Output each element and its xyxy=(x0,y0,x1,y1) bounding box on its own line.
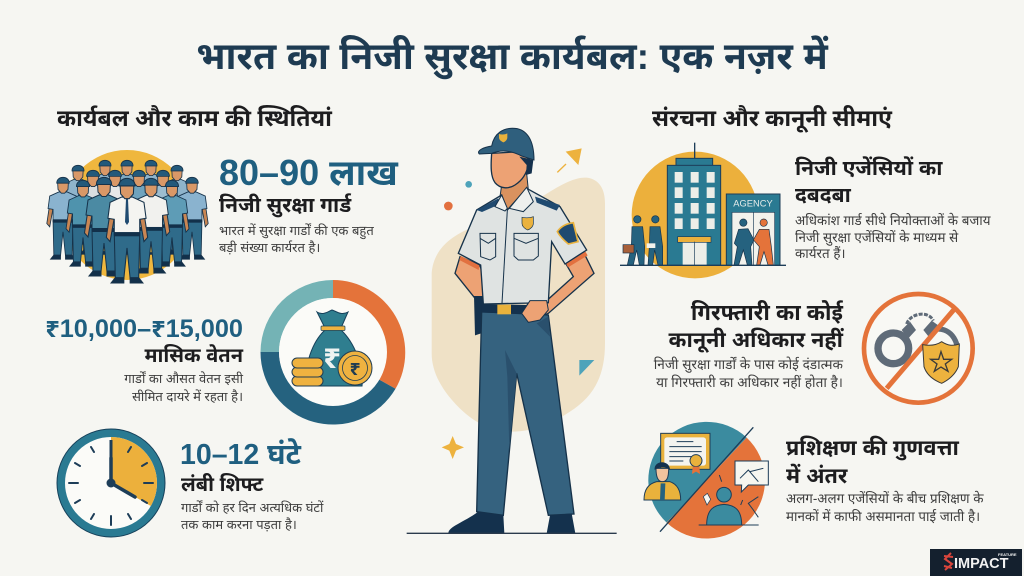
icon: agency buildings xyxy=(620,143,786,278)
cap badge xyxy=(499,133,507,142)
icon: banned handcuffs and badge xyxy=(863,293,974,404)
description line 2: बड़ी संख्या कार्यरत है। xyxy=(219,240,320,255)
logo: Impact Feature: FEATURE xyxy=(998,552,1017,557)
ground line xyxy=(407,531,617,535)
epaulettes and collar xyxy=(477,187,560,303)
title: भारत का निजी सुरक्षा कार्यबल: एक नज़र में xyxy=(196,35,829,79)
shirt xyxy=(458,188,587,304)
icon: split circle of training xyxy=(644,422,768,539)
trousers xyxy=(477,312,574,515)
icon: donut with money bag: ₹ xyxy=(323,340,341,375)
description line 2: मानकों में काफी असमानता पाई जाती है। xyxy=(786,509,980,524)
heading: structure and legal limits: संरचना और कानूनी सीमाएं xyxy=(652,105,893,133)
panel: long shifts xyxy=(57,429,324,537)
sleeve bands xyxy=(459,252,588,270)
description: निजी सुरक्षा गार्डों के पास कोई दंडात्मक xyxy=(654,355,844,374)
icon: donut with money bag xyxy=(260,280,405,425)
description line 2: निजी सुरक्षा एजेंसियों के माध्यम से xyxy=(795,230,959,246)
trouser shading xyxy=(505,317,550,450)
sign: AGENCY: AGENCY xyxy=(733,198,773,208)
heading line 2: कानूनी अधिकार नहीं xyxy=(669,327,845,354)
neck xyxy=(500,173,528,212)
panel: guard count xyxy=(47,150,399,283)
description: भारत में सुरक्षा गार्डों की एक बहुत xyxy=(219,223,374,240)
description line 3: कार्यरत हैं। xyxy=(795,246,846,261)
head xyxy=(491,152,530,188)
belt buckle xyxy=(497,305,511,314)
description line 2: सीमित दायरे में रहता है। xyxy=(132,389,243,404)
stat: hours: 10–12 घंटे xyxy=(180,437,302,471)
shoulder patch xyxy=(557,223,578,244)
label: long shift: लंबी शिफ्ट xyxy=(181,472,265,496)
shoes xyxy=(448,512,575,533)
decorative shapes xyxy=(442,148,594,459)
description: गार्डों को हर दिन अत्यधिक घंटों xyxy=(181,500,324,515)
illustration: security guard xyxy=(407,128,617,533)
heading line 1: निजी एजेंसियों का xyxy=(795,156,943,180)
icon: group of guards xyxy=(47,150,208,283)
icon: donut with money bag: ₹ xyxy=(350,359,360,380)
heading line 1: गिरफ्तारी का कोई xyxy=(691,300,844,325)
heading line 1: प्रशिक्षण की गुणवत्ता xyxy=(786,435,959,461)
heading: workforce and working conditions: कार्यबल और काम की स्थितियां xyxy=(57,105,333,131)
shirt badge xyxy=(522,217,533,230)
logo: Impact Feature xyxy=(930,549,1022,576)
label: monthly salary: मासिक वेतन xyxy=(144,343,244,367)
description line 2: तक काम करना पड़ता है। xyxy=(181,517,297,532)
label: private security guards: निजी सुरक्षा गार्ड xyxy=(219,193,352,218)
panel: no legal arrest powers xyxy=(654,293,974,404)
logo: Impact Feature: IMPACT xyxy=(954,556,1009,572)
beige blob xyxy=(432,178,605,432)
cap xyxy=(479,128,534,160)
description: अधिकांश गार्ड सीधे नियोक्ताओं के बजाय xyxy=(795,213,991,228)
holster xyxy=(474,296,483,335)
heading line 2: में अंतर xyxy=(786,463,848,488)
belt xyxy=(482,304,528,314)
pockets xyxy=(480,233,538,260)
panel: dominance of private agencies xyxy=(620,143,991,278)
icon: clock xyxy=(57,429,165,537)
description: अलग-अलग एजेंसियों के बीच प्रशिक्षण के xyxy=(786,491,984,506)
description line 2: या गिरफ्तारी का अधिकार नहीं होता है। xyxy=(656,374,843,390)
hair xyxy=(519,157,533,175)
hand xyxy=(522,301,548,322)
stat: salary range: ₹10,000–₹15,000 xyxy=(45,315,243,343)
panel: monthly salary xyxy=(45,280,405,425)
arms xyxy=(455,252,594,322)
heading line 2: दबदबा xyxy=(795,184,852,207)
panel: training quality gap xyxy=(644,422,984,539)
stat: 80-90 lakh: 80–90 लाख xyxy=(219,152,399,193)
description: गार्डों का औसत वेतन इसी xyxy=(124,371,244,386)
